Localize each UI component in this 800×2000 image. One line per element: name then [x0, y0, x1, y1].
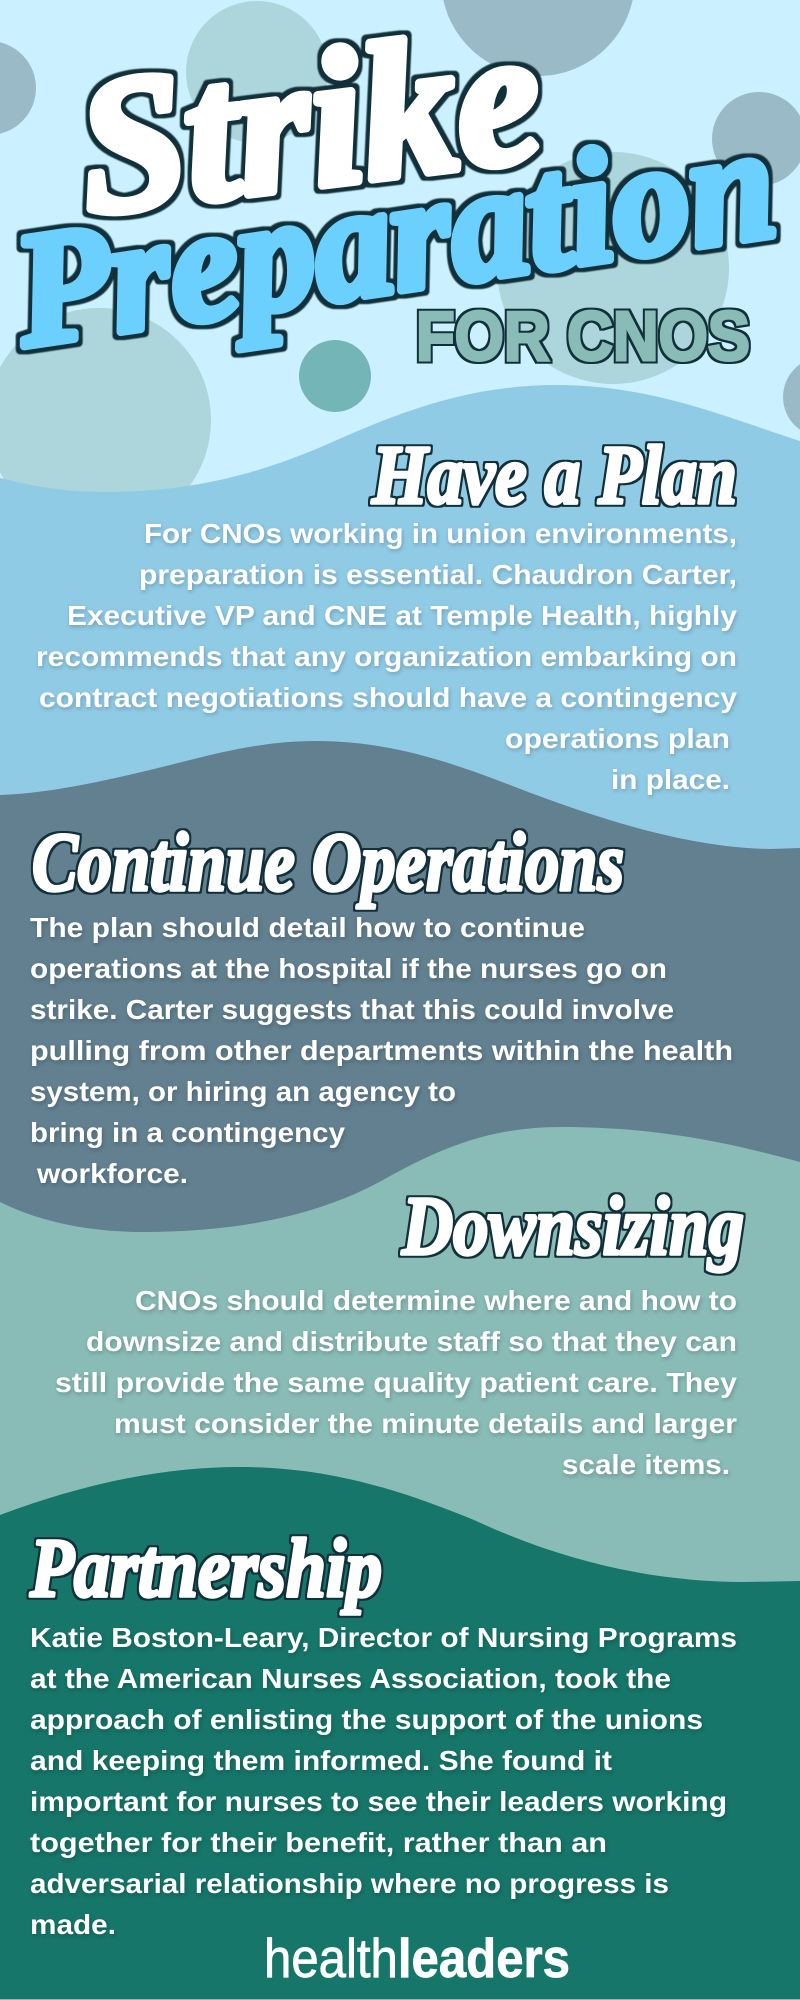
text block: Have a Plan: preparation is essential. Chaudron Carter,	[139, 559, 737, 590]
text block: Continue Operations: workforce.	[36, 1158, 188, 1189]
text block: Continue Operations: strike. Carter suggests that this could involve	[30, 994, 674, 1025]
text block: Have a Plan: in place.	[611, 764, 730, 795]
title: Preparation: Preparation	[2, 91, 786, 381]
panel: Partnership background	[0, 1467, 800, 1999]
text block: Partnership: approach of enlisting the support of the unions	[30, 1704, 703, 1735]
heading: Downsizing: Downsizing	[401, 1180, 744, 1273]
text block: Have a Plan: contract negotiations should have a contingency	[39, 682, 737, 713]
text block: Partnership: together for their benefit, rather than an	[30, 1827, 607, 1858]
text block: Continue Operations	[30, 912, 733, 1189]
text block: Downsizing: downsize and distribute staff so that they can	[86, 1326, 737, 1357]
logo: healthleaders: healthleaders	[264, 1927, 570, 1989]
panel: Downsizing background	[0, 1127, 800, 2000]
text block: Downsizing: must consider the minute details and larger	[114, 1408, 737, 1439]
text block: Continue Operations: The plan should detail how to continue	[30, 912, 585, 943]
text block: Have a Plan: operations plan	[505, 723, 730, 754]
heading: Have a Plan: Have a Plan	[371, 429, 737, 522]
text block: Partnership: Katie Boston-Leary, Director of Nursing Programs	[30, 1622, 737, 1653]
text block: Have a Plan	[36, 518, 737, 795]
text block: Have a Plan: recommends that any organization embarking on	[36, 641, 737, 672]
heading: Continue Operations: Continue Operations	[32, 816, 624, 909]
text block: Partnership: adversarial relationship where no progress is	[30, 1868, 669, 1899]
text block: Continue Operations: operations at the hospital if the nurses go on	[30, 953, 667, 984]
text block: Partnership	[30, 1622, 737, 1940]
text block: Partnership: important for nurses to see their leaders working	[30, 1786, 727, 1817]
text block: Partnership: and keeping them informed. She found it	[30, 1745, 612, 1776]
text block: Have a Plan: Executive VP and CNE at Temple Health, highly	[67, 600, 737, 631]
text block: Have a Plan: For CNOs working in union environments,	[144, 518, 737, 549]
text block: Partnership: made.	[30, 1909, 116, 1940]
text block: Continue Operations: bring in a contingency	[30, 1117, 345, 1148]
decorative circles	[0, 0, 800, 532]
text block: Partnership: at the American Nurses Association, took the	[30, 1663, 671, 1694]
panel: Continue Operations background	[0, 741, 800, 2000]
text block: Continue Operations: pulling from other departments within the health	[30, 1035, 733, 1066]
text block: Downsizing: still provide the same quality patient care. They	[55, 1367, 737, 1398]
text block: Downsizing: CNOs should determine where and how to	[135, 1285, 737, 1316]
text block: Continue Operations: system, or hiring an agency to	[30, 1076, 456, 1107]
heading: Partnership: Partnership	[29, 1522, 382, 1615]
title: Strike: Strike	[67, 0, 552, 256]
text block: Downsizing: scale items.	[562, 1449, 730, 1480]
text block: Downsizing	[55, 1285, 737, 1480]
title: for CNOs: FOR CNOS	[416, 297, 750, 375]
